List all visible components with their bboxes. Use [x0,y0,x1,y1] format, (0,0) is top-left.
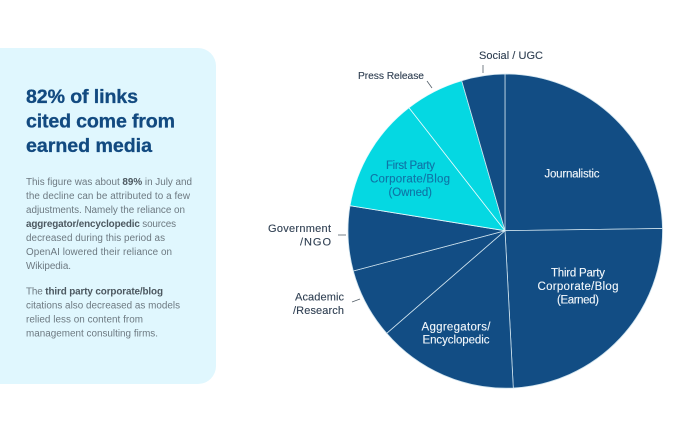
slice: Journalistic [505,74,662,231]
text block: first paragraph: This figure was about 89% in July and [26,177,192,188]
text block: first paragraph: decreased during this period as [26,233,165,244]
panel: summary card [0,48,216,384]
text block: second paragraph: citations also decreased as models [26,300,180,312]
text block: first paragraph: Wikipedia. [26,261,71,272]
label: Aggregators/Encyclopedic: Encyclopedic [422,334,490,346]
slice: Social / UGC [462,74,505,231]
label: First Party Corporate/Blog (Owned): (Owned) [388,187,432,199]
label: Third Party Corporate/Blog (Earned): (Earned) [557,294,599,306]
label: First Party Corporate/Blog (Owned) [370,160,450,199]
label: Academic /Research: /Research [293,305,344,317]
label: First Party Corporate/Blog (Owned): Corporate/Blog [370,174,450,186]
slice: Academic/Research [353,231,505,333]
heading [26,86,175,157]
label: Aggregators/Encyclopedic [422,322,491,346]
text block: second paragraph: The third party corporate/blog [26,286,163,298]
slice: Press Release [409,81,505,231]
label: Social / UGC: Social / UGC [479,50,543,62]
text block: second paragraph: relied less on content from [26,314,143,326]
pie chart: citation sources [348,74,663,388]
text block: first paragraph: OpenAI lowered their reliance on [26,247,172,258]
label: Press Release [358,71,432,88]
label: Third Party Corporate/Blog (Earned): Third Party [551,268,605,280]
label: Aggregators/Encyclopedic: Aggregators/ [422,322,491,334]
heading: cited come from [26,110,175,132]
slice: Aggregators/Encyclopedic [387,231,513,388]
text block: second paragraph [26,286,180,340]
heading: 82% of links [26,86,138,108]
label: Journalistic: Journalistic [544,168,600,180]
text block: first paragraph: the decline can be attributed to a few [26,191,191,202]
label: Government /NGO: /NGO [300,236,331,248]
label: Government /NGO [268,223,346,248]
text block: first paragraph: adjustments. Namely the reliance on [26,205,185,216]
label: First Party Corporate/Blog (Owned): First Party [386,160,435,172]
label: Government /NGO: Government [268,223,331,235]
label: Social / UGC [479,50,543,73]
slice: First Party Corporate/Blog (Owned) [350,108,505,231]
label: Third Party Corporate/Blog (Earned): Corporate/Blog [538,281,618,293]
label: Third Party Corporate/Blog (Earned) [538,268,618,306]
text block: first paragraph: aggregator/encyclopedic sources [26,219,176,230]
label: Press Release: Press Release [358,71,424,82]
text block: second paragraph: management consulting firms. [26,328,158,340]
slice: Government/NGO [348,206,505,271]
label: Academic /Research [293,292,360,317]
heading: earned media [26,135,153,157]
label: Academic /Research: Academic [295,292,344,304]
text block: first paragraph [26,177,192,272]
slice: Third Party Corporate/Blog (Earned) [505,228,663,388]
